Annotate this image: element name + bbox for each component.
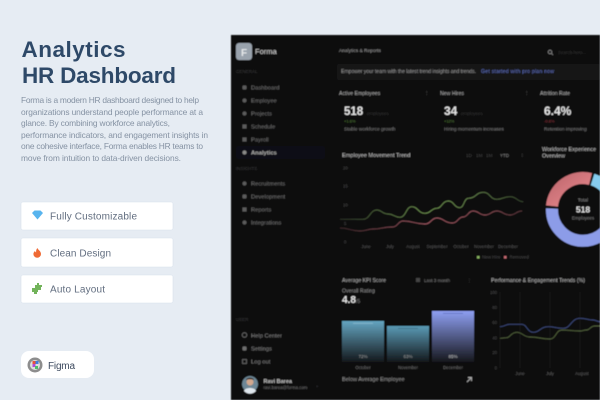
section label: user: USER [236,317,249,322]
kpi card: active employees: ⋮ [424,91,430,97]
y axis labels: 0 [344,240,347,244]
series: engagement [500,326,600,339]
line chart [340,166,529,260]
figma badge [21,351,94,378]
icon: gem [32,210,43,220]
figma badge: Figma [48,361,75,372]
x axis labels: November [474,244,494,249]
y axis labels: 20 [492,350,498,355]
panel: average kpi score [335,270,485,392]
kpi card: attrition rate [537,87,600,137]
kpi card: active employees [335,87,433,137]
nav: general items [236,86,325,159]
user profile: Ravi Barea [264,379,293,385]
logo: Forma [255,47,277,56]
top bar: Analytics & Reports [339,48,381,54]
donut chart [552,178,600,241]
description paragraph: glance. By combining workforce analytics, [21,118,170,128]
icon: search [548,50,553,55]
panel: workforce experience overview: Overview [542,154,565,160]
rating value: 4.8 [342,295,356,306]
nav: user items [242,333,282,366]
donut center label [572,198,595,220]
nav: insights items: Recruitments [251,182,285,188]
section label: insights: INSIGHTS [236,166,257,171]
time range tabs: YTD [500,153,510,158]
nav: general items: Employee [251,98,277,104]
kpi card: active employees: Stable workforce growth [344,126,396,132]
series: new hire [340,192,523,219]
description paragraph: performance indicators, and engagement insights in [21,130,208,140]
logo: F [241,48,247,59]
feature pill: clean design: Clean Design [50,248,111,260]
nav: general items: Dashboard [251,86,279,92]
bar: october: 72% [358,354,368,359]
x axis labels: August [575,371,589,376]
panel: performance and engagement trends [489,270,600,392]
time range tabs: 1D [466,153,473,158]
nav: user items: Help Center [251,334,282,340]
banner: Get started with pro plan now [481,69,554,75]
bar: december: 85% [448,354,458,359]
bar: november: 63% [403,354,413,359]
x axis labels: September [426,244,448,249]
time range tabs: 1M [476,153,483,158]
x axis labels: July [546,371,555,376]
feature pill: clean design [21,238,173,267]
time range tabs: ⋮ [520,153,524,158]
bar chart [342,311,474,370]
avatar [242,376,258,394]
logo [236,43,277,60]
time range tabs: 1M [486,153,493,158]
panel: average kpi score: Overall Rating [342,288,375,294]
feature pill: auto layout [21,275,173,303]
x axis labels: July [386,244,395,249]
user profile [242,376,319,394]
kpi card: attrition rate: Attrition Rate [540,91,570,97]
y axis labels: 15 [343,184,348,188]
nav: insights items [242,182,286,226]
user profile: ⌄ [315,383,319,389]
left column [21,37,208,378]
y axis labels: 0 [495,366,498,370]
description paragraph: Forma is a modern HR dashboard designed to help [21,95,199,105]
kpi card: new hires: +12% [444,118,455,124]
description paragraph [21,95,208,163]
donut center label: Employees [572,216,595,220]
kpi card: new hires: employees [461,111,484,116]
time range tabs [466,153,524,158]
y axis labels [343,166,348,244]
dashboard screenshot [231,35,600,400]
icon: puzzle piece [32,283,42,294]
feature pill: fully customizable: Fully Customizable [50,212,137,222]
title: Analytics [22,37,126,62]
kpi card: new hires: New Hires [440,91,464,97]
feature pill: auto layout: Auto Layout [50,284,105,296]
period filter: Last 3 month [424,278,451,283]
kpi card: attrition rate: Retention improving [544,126,587,132]
legend [477,254,529,260]
kpi card: active employees: employees [367,111,390,116]
donut center label: Total [578,198,588,204]
banner [337,64,600,80]
kpi card: new hires: 34 [444,104,458,118]
x axis labels [515,371,589,376]
month labels: November [398,365,418,370]
nav: insights items: Development [251,194,286,200]
y axis labels: 20 [343,166,348,170]
nav: user items: Log out [251,360,271,366]
period filter [416,278,472,284]
x axis labels [361,244,518,249]
nav: general items: Schedule [251,124,275,130]
kpi card: active employees: +1.6% [344,118,356,124]
title: HR Dashboard [22,63,176,88]
sidebar [231,35,331,400]
icon: arrow [467,378,472,382]
icon: flame [33,248,41,258]
x axis labels: June [361,244,371,249]
user profile: ravi.barea@forma.com [264,385,308,390]
grid lines [500,292,580,368]
kpi card: active employees: 518 [344,106,364,118]
description paragraph: one cohesive interface, Forma enables HR teams to [21,141,203,151]
nav: user items: Settings [251,346,272,352]
month labels: October [355,365,371,370]
y axis labels: 80 [492,305,498,310]
panel: workforce experience overview [539,145,600,265]
legend: Removed [510,254,529,260]
panel: workforce experience overview: Workforce Experience [542,147,596,153]
description paragraph: organizations understand people performance at a [21,107,203,117]
y axis labels [490,290,498,370]
series: removed [340,211,522,231]
month labels: December [443,365,463,370]
x axis labels: October [453,244,469,249]
kpi card: attrition rate: 6.4% [544,104,572,118]
nav: insights items: Integrations [251,220,281,226]
kpi card: active employees: Active Employees [339,91,381,97]
nav: general items: Projects [251,112,272,118]
nav: insights items: Reports [251,208,271,214]
top bar [339,48,586,55]
panel: performance and engagement trends: Performance & Engagement Trends (%) [491,278,585,284]
nav: general items: Payroll [251,138,269,144]
series: performance [500,318,600,332]
rating value: /5 [356,299,360,305]
x axis labels: June [515,371,525,376]
section label: general: GENERAL [236,69,258,74]
panel: average kpi score: Below Average Employee [342,377,405,383]
kpi card: new hires [436,87,534,137]
nav item: analytics active: Analytics [251,150,277,156]
title [22,37,176,88]
x axis labels: August [406,244,420,249]
period filter: ⋮ [467,278,472,284]
line chart [490,290,600,376]
kpi card: new hires: Hiring momentum increases [444,126,504,132]
panel: employee movement trend: Employee Movement Trend [342,153,410,159]
banner: Empower your team with the latest trend insights and trends. [341,69,476,75]
description paragraph: move from intuition to data-driven decisions. [21,153,181,163]
icon: figma logo [28,358,42,372]
kpi card: attrition rate: -0.8% [544,118,555,124]
y axis labels: 40 [492,336,498,340]
y axis labels: 10 [343,202,348,208]
panel: average kpi score: Average KPI Score [342,278,386,284]
kpi card: new hires: ⋮ [524,91,530,97]
legend: New Hire [482,254,501,260]
x axis labels: December [498,244,518,249]
panel: employee movement trend [335,145,536,265]
top bar: Search here... [558,50,586,55]
y axis labels: 5 [344,221,347,226]
feature pill: fully customizable [21,202,173,230]
y axis labels: 100 [490,290,498,295]
y axis labels: 60 [492,320,498,325]
donut center label: 518 [576,204,590,214]
month labels [355,365,463,370]
